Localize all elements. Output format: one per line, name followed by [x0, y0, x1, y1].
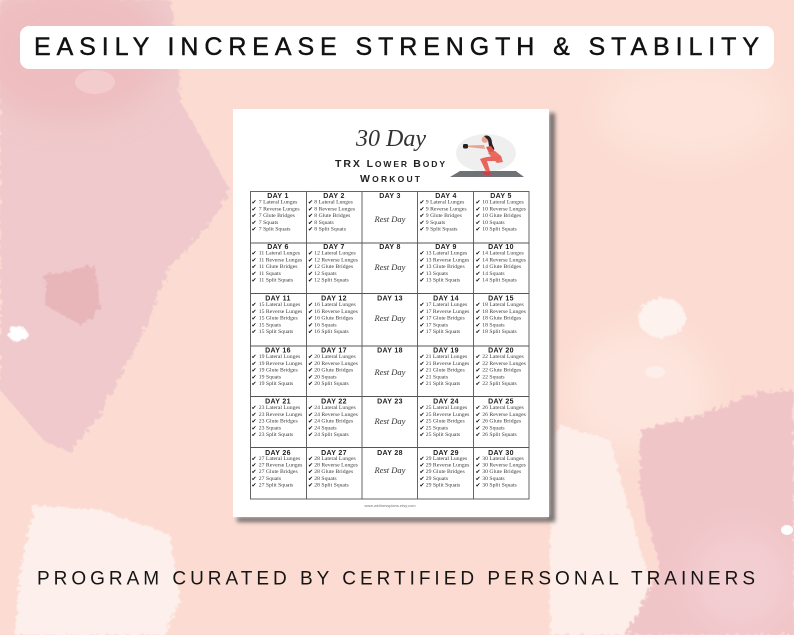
- row 5 cells: [252, 398, 303, 438]
- workout sheet: Rest Day: [374, 465, 406, 475]
- workout sheet: ✔: [420, 468, 425, 476]
- row 2 cells: 11 Split Squats: [259, 278, 294, 284]
- workout sheet: ✔: [476, 250, 481, 257]
- row 6 cells: ✔: [252, 482, 257, 489]
- workout sheet: 24 Squats: [314, 425, 337, 431]
- row 3 cells: [252, 296, 303, 336]
- workout sheet: 30 Glute Bridges: [482, 469, 522, 475]
- workout sheet: 10 Reverse Lunges: [482, 206, 527, 212]
- workout sheet: ✔: [476, 199, 481, 206]
- workout sheet: ✔: [308, 468, 313, 476]
- workout sheet: DAY 18: [377, 348, 403, 354]
- workout sheet: 16 Glute Bridges: [314, 316, 354, 322]
- row 1 cells: 7 Split Squats: [259, 226, 291, 232]
- row 4 cells: ✔: [252, 374, 257, 381]
- row 1 cells: 7 Squats: [259, 220, 279, 226]
- workout sheet: ✔: [308, 482, 313, 489]
- workout sheet: ✔: [308, 380, 313, 388]
- workout sheet: ✔: [420, 456, 425, 462]
- workout sheet: 14 Glute Bridges: [482, 264, 522, 270]
- workout sheet: 21 Lateral Lunges: [426, 354, 468, 360]
- workout sheet: ✔: [420, 432, 425, 438]
- workout sheet: 22 Split Squats: [482, 381, 518, 387]
- workout sheet: Rest Day: [374, 262, 406, 272]
- workout sheet: 16 Lateral Lunges: [314, 302, 356, 308]
- workout sheet: 20 Squats: [314, 374, 337, 380]
- row 4 cells: 19 Reverse Lunges: [259, 361, 303, 367]
- workout sheet: 16 Squats: [314, 322, 337, 328]
- heading: EASILY INCREASE STRENGTH & STABILITY: [34, 33, 759, 61]
- workout sheet: 17 Reverse Lunges: [426, 309, 470, 315]
- workout sheet: 17 Squats: [426, 322, 449, 328]
- workout sheet: 9 Squats: [426, 220, 446, 226]
- workout sheet: 12 Split Squats: [314, 278, 350, 284]
- row 1 cells: DAY 1: [267, 193, 289, 200]
- workout sheet: ✔: [420, 354, 425, 360]
- workout sheet: 18 Lateral Lunges: [482, 302, 524, 308]
- workout sheet: DAY 2: [323, 193, 345, 200]
- workout sheet: ✔: [420, 380, 425, 388]
- workout sheet: 20 Reverse Lunges: [314, 361, 359, 367]
- workout sheet: ✔: [308, 374, 313, 381]
- workout sheet: [233, 109, 549, 517]
- workout calendar grid: [250, 192, 529, 499]
- workout sheet: 13 Split Squats: [426, 278, 461, 284]
- workout sheet: 21 Split Squats: [426, 381, 461, 387]
- workout sheet: Rest Day: [374, 214, 406, 224]
- row 3 cells: 15 Reverse Lunges: [259, 309, 303, 315]
- workout sheet: ✔: [308, 270, 313, 277]
- workout sheet: 10 Glute Bridges: [482, 213, 522, 219]
- workout sheet: ✔: [476, 380, 481, 388]
- workout sheet: DAY 5: [490, 193, 512, 200]
- workout sheet: DAY 29: [433, 450, 459, 457]
- row 6 cells: 27 Lateral Lunges: [259, 456, 301, 462]
- workout sheet: 12 Lateral Lunges: [314, 250, 356, 256]
- workout sheet: 13 Reverse Lunges: [426, 257, 470, 263]
- workout sheet: ✔: [308, 302, 313, 308]
- workout sheet: DAY 25: [488, 398, 514, 406]
- row 4 cells: ✔: [252, 360, 257, 367]
- row 6 cells: 27 Squats: [259, 476, 282, 482]
- workout sheet: ✔: [476, 404, 481, 412]
- row 2 cells: ✔: [252, 250, 257, 257]
- workout sheet: DAY 19: [433, 348, 459, 354]
- workout sheet: DAY 15: [488, 296, 514, 302]
- row 6 cells: 27 Glute Bridges: [259, 469, 298, 475]
- workout sheet: 12 Glute Bridges: [314, 264, 354, 270]
- workout sheet: ✔: [420, 462, 425, 469]
- workout sheet: 21 Reverse Lunges: [426, 361, 470, 367]
- workout sheet: ✔: [476, 212, 481, 220]
- workout sheet: DAY 20: [488, 348, 514, 354]
- row 2 cells: ✔: [252, 277, 257, 284]
- row 1 cells: ✔: [252, 206, 257, 213]
- workout sheet: ✔: [308, 219, 313, 226]
- workout sheet: ✔: [476, 475, 481, 482]
- workout sheet: 16 Reverse Lunges: [314, 309, 359, 315]
- workout sheet: 29 Split Squats: [426, 482, 461, 488]
- workout sheet: 24 Lateral Lunges: [314, 405, 356, 411]
- workout sheet: ✔: [308, 315, 313, 322]
- row 5 cells: 23 Lateral Lunges: [259, 405, 301, 411]
- row 3 cells: 15 Glute Bridges: [259, 316, 298, 322]
- workout sheet: ✔: [308, 462, 313, 469]
- row 3 cells: ✔: [252, 322, 257, 329]
- workout sheet: ✔: [476, 468, 481, 476]
- row 1 cells: ✔: [252, 226, 257, 233]
- footer caption: PROGRAM CURATED BY CERTIFIED PERSONAL TRAINERS: [37, 568, 755, 590]
- workout sheet: ✔: [476, 308, 481, 315]
- workout sheet: ✔: [308, 411, 313, 418]
- workout sheet: ✔: [420, 277, 425, 284]
- row 5 cells: ✔: [252, 404, 257, 412]
- row 5 cells: 23 Reverse Lunges: [259, 412, 303, 418]
- row 6 cells: 27 Reverse Lunges: [259, 462, 303, 468]
- row 3 cells: DAY 11: [265, 296, 291, 302]
- workout sheet: 8 Split Squats: [314, 226, 347, 232]
- workout sheet: Rest Day: [374, 416, 406, 426]
- workout sheet: Rest Day: [374, 313, 406, 323]
- row 4 cells: ✔: [252, 380, 257, 388]
- workout sheet: ✔: [476, 374, 481, 381]
- workout sheet: ✔: [420, 367, 425, 374]
- row 6 cells: [252, 450, 303, 489]
- row 4 cells: [252, 348, 303, 388]
- row 2 cells: 11 Glute Bridges: [259, 264, 298, 270]
- workout sheet: 30 Squats: [482, 476, 505, 482]
- workout sheet: ✔: [476, 432, 481, 438]
- row 6 cells: ✔: [252, 456, 257, 462]
- row 5 cells: DAY 21: [265, 398, 291, 406]
- workout sheet: ✔: [420, 322, 425, 329]
- workout sheet: 13 Lateral Lunges: [426, 250, 468, 256]
- workout sheet: DAY 13: [377, 296, 403, 302]
- row 5 cells: ✔: [252, 418, 257, 425]
- workout sheet: ✔: [476, 270, 481, 277]
- workout sheet: 25 Glute Bridges: [426, 418, 465, 424]
- workout sheet: ✔: [420, 315, 425, 322]
- workout sheet: 30 Split Squats: [482, 482, 518, 488]
- workout sheet: 25 Split Squats: [426, 432, 461, 438]
- workout sheet: 18 Reverse Lunges: [482, 309, 527, 315]
- row 2 cells: ✔: [252, 264, 257, 270]
- workout sheet: 8 Reverse Lunges: [314, 206, 356, 212]
- row 4 cells: DAY 16: [265, 348, 291, 354]
- workout sheet: ✔: [308, 418, 313, 425]
- workout sheet: ✔: [308, 456, 313, 462]
- workout sheet: DAY 9: [435, 244, 457, 251]
- workout sheet: DAY 28: [377, 450, 403, 457]
- workout sheet: ✔: [476, 328, 481, 336]
- workout sheet: ✔: [308, 367, 313, 374]
- row 3 cells: 15 Lateral Lunges: [259, 302, 301, 308]
- workout sheet: ✔: [476, 264, 481, 270]
- row 3 cells: 15 Squats: [259, 322, 282, 328]
- workout sheet: 22 Glute Bridges: [482, 368, 522, 374]
- workout sheet: ✔: [308, 264, 313, 270]
- workout sheet: ✔: [420, 264, 425, 270]
- workout sheet: 25 Squats: [426, 425, 449, 431]
- workout sheet: 28 Reverse Lunges: [314, 462, 359, 468]
- row 5 cells: ✔: [252, 425, 257, 432]
- workout sheet: 18 Squats: [482, 322, 505, 328]
- workout sheet: DAY 17: [321, 348, 347, 354]
- row 1 cells: [252, 193, 300, 233]
- workout sheet: ✔: [476, 418, 481, 425]
- sheet title: 30 Day: 30 Day: [355, 126, 426, 152]
- workout sheet: ✔: [476, 206, 481, 213]
- workout sheet: DAY 24: [433, 398, 459, 406]
- workout sheet: ✔: [308, 425, 313, 432]
- workout sheet: ✔: [420, 226, 425, 233]
- workout sheet: ✔: [308, 360, 313, 367]
- workout sheet: ✔: [308, 328, 313, 336]
- workout sheet: 14 Split Squats: [482, 278, 518, 284]
- row 4 cells: 19 Split Squats: [259, 381, 294, 387]
- workout sheet: 26 Reverse Lunges: [482, 412, 527, 418]
- workout sheet: ✔: [308, 199, 313, 206]
- row 4 cells: ✔: [252, 367, 257, 374]
- icon: woman squatting on mat: [450, 134, 524, 177]
- workout sheet: 16 Split Squats: [314, 329, 350, 335]
- workout sheet: 29 Lateral Lunges: [426, 456, 468, 462]
- workout sheet: 25 Reverse Lunges: [426, 412, 470, 418]
- workout sheet: 21 Squats: [426, 374, 449, 380]
- page shadow: [237, 113, 555, 522]
- workout sheet: ✔: [476, 257, 481, 264]
- workout sheet: 9 Glute Bridges: [426, 213, 463, 219]
- workout sheet: ✔: [476, 462, 481, 469]
- row 1 cells: 7 Lateral Lunges: [259, 200, 298, 206]
- workout sheet: ✔: [476, 456, 481, 462]
- workout sheet: DAY 27: [321, 450, 347, 457]
- workout sheet: 9 Lateral Lunges: [426, 200, 465, 206]
- workout sheet: ✔: [420, 374, 425, 381]
- row 2 cells: ✔: [252, 257, 257, 264]
- workout sheet: 22 Reverse Lunges: [482, 361, 527, 367]
- workout sheet: ✔: [476, 367, 481, 374]
- workout sheet: ✔: [420, 411, 425, 418]
- workout sheet: 14 Reverse Lunges: [482, 257, 527, 263]
- row 4 cells: ✔: [252, 354, 257, 360]
- workout sheet: 14 Lateral Lunges: [482, 250, 524, 256]
- workout sheet: 13 Squats: [426, 271, 449, 277]
- row 2 cells: DAY 6: [267, 244, 289, 251]
- header pill: [20, 26, 774, 69]
- workout sheet: ✔: [420, 360, 425, 367]
- workout sheet: ✔: [308, 432, 313, 438]
- row 3 cells: ✔: [252, 308, 257, 315]
- workout sheet: 8 Glute Bridges: [314, 213, 351, 219]
- row 6 cells: ✔: [252, 462, 257, 469]
- workout sheet: 13 Glute Bridges: [426, 264, 465, 270]
- workout sheet: ✔: [308, 404, 313, 412]
- row 1 cells: 7 Glute Bridges: [259, 213, 296, 219]
- workout sheet: DAY 14: [433, 296, 459, 302]
- row 5 cells: ✔: [252, 411, 257, 418]
- workout sheet: 30 Lateral Lunges: [482, 456, 524, 462]
- workout sheet: DAY 8: [379, 244, 401, 251]
- workout sheet: 9 Split Squats: [426, 226, 458, 232]
- workout sheet: ✔: [308, 354, 313, 360]
- workout sheet: ✔: [420, 302, 425, 308]
- workout sheet: ✔: [420, 418, 425, 425]
- workout sheet: 30 Reverse Lunges: [482, 462, 527, 468]
- workout sheet: DAY 7: [323, 244, 345, 251]
- workout sheet: 10 Lateral Lunges: [482, 200, 524, 206]
- workout sheet: 29 Reverse Lunges: [426, 462, 470, 468]
- workout sheet: 26 Squats: [482, 425, 505, 431]
- row 6 cells: DAY 26: [265, 450, 291, 457]
- workout sheet: 25 Lateral Lunges: [426, 405, 468, 411]
- workout sheet: 26 Split Squats: [482, 432, 518, 438]
- workout sheet: DAY 22: [321, 398, 347, 406]
- row 5 cells: 23 Squats: [259, 425, 282, 431]
- workout sheet: 8 Squats: [314, 220, 335, 226]
- row 3 cells: ✔: [252, 315, 257, 322]
- workout sheet: ✔: [476, 360, 481, 367]
- workout sheet: ✔: [308, 475, 313, 482]
- workout sheet: ✔: [420, 199, 425, 206]
- workout sheet: 10 Squats: [482, 220, 505, 226]
- workout sheet: 22 Squats: [482, 374, 505, 380]
- workout sheet: ✔: [308, 226, 313, 233]
- workout sheet: ✔: [420, 270, 425, 277]
- workout sheet: ✔: [420, 206, 425, 213]
- row 4 cells: 19 Squats: [259, 374, 282, 380]
- workout sheet: 20 Split Squats: [314, 381, 350, 387]
- row 2 cells: 11 Lateral Lunges: [259, 250, 301, 256]
- row 3 cells: ✔: [252, 302, 257, 308]
- workout sheet: 22 Lateral Lunges: [482, 354, 524, 360]
- workout sheet: 17 Glute Bridges: [426, 316, 465, 322]
- workout sheet: ✔: [308, 277, 313, 284]
- row 1 cells: ✔: [252, 212, 257, 220]
- workout sheet: ✔: [476, 482, 481, 489]
- workout sheet: ✔: [476, 411, 481, 418]
- workout sheet: 14 Squats: [482, 271, 505, 277]
- row 2 cells: ✔: [252, 270, 257, 277]
- workout sheet: 10 Split Squats: [482, 226, 518, 232]
- workout sheet: ✔: [420, 482, 425, 489]
- workout sheet: ✔: [476, 354, 481, 360]
- workout sheet: ✔: [308, 212, 313, 220]
- workout sheet: 29 Squats: [426, 476, 449, 482]
- workout sheet: ✔: [420, 257, 425, 264]
- workout sheet: 28 Lateral Lunges: [314, 456, 356, 462]
- row 6 cells: ✔: [252, 468, 257, 476]
- workout sheet: ✔: [420, 404, 425, 412]
- workout sheet: ✔: [420, 308, 425, 315]
- sheet title: TRX Lower Body: TRX LOWER BODY: [335, 158, 445, 170]
- workout sheet: DAY 3: [379, 193, 401, 200]
- workout sheet: 24 Glute Bridges: [314, 418, 354, 424]
- workout sheet: 28 Squats: [314, 476, 337, 482]
- row 3 cells: 15 Split Squats: [259, 329, 294, 335]
- workout sheet: 24 Reverse Lunges: [314, 412, 359, 418]
- workout sheet: ✔: [420, 475, 425, 482]
- workout sheet: DAY 4: [435, 193, 457, 200]
- workout sheet: 28 Glute Bridges: [314, 469, 354, 475]
- row 4 cells: 19 Lateral Lunges: [259, 354, 301, 360]
- workout sheet: ✔: [420, 219, 425, 226]
- row 2 cells: [252, 244, 303, 284]
- workout sheet: 18 Split Squats: [482, 329, 518, 335]
- workout sheet: 12 Reverse Lunges: [314, 257, 359, 263]
- workout sheet: 26 Lateral Lunges: [482, 405, 524, 411]
- sheet title: Workout: W ORKOUT: [360, 173, 421, 185]
- workout sheet: 24 Split Squats: [314, 432, 350, 438]
- row 4 cells: 19 Glute Bridges: [259, 368, 298, 374]
- workout sheet: ✔: [420, 425, 425, 432]
- workout sheet: ✔: [476, 219, 481, 226]
- workout sheet: ✔: [308, 322, 313, 329]
- row 5 cells: ✔: [252, 432, 257, 438]
- workout sheet: ✔: [476, 425, 481, 432]
- workout sheet: DAY 23: [377, 398, 403, 406]
- workout sheet: ✔: [420, 212, 425, 220]
- workout sheet: 9 Reverse Lunges: [426, 206, 467, 212]
- row 1 cells: ✔: [252, 219, 257, 226]
- row 1 cells: 7 Reverse Lunges: [259, 206, 300, 212]
- row 6 cells: 27 Split Squats: [259, 482, 294, 488]
- row 1 cells: ✔: [252, 199, 257, 206]
- workout sheet: ✔: [308, 206, 313, 213]
- workout sheet: DAY 12: [321, 296, 347, 302]
- workout sheet: ✔: [308, 257, 313, 264]
- row 5 cells: 23 Glute Bridges: [259, 418, 298, 424]
- workout sheet: 8 Lateral Lunges: [314, 200, 354, 206]
- workout sheet: ✔: [308, 308, 313, 315]
- workout sheet: ✔: [308, 250, 313, 257]
- workout sheet: 12 Squats: [314, 271, 337, 277]
- workout sheet: 20 Glute Bridges: [314, 368, 354, 374]
- workout sheet: ✔: [476, 302, 481, 308]
- workout sheet: ✔: [476, 226, 481, 233]
- workout sheet: ✔: [420, 328, 425, 336]
- workout sheet: 21 Glute Bridges: [426, 368, 465, 374]
- workout sheet: DAY 10: [488, 244, 514, 251]
- row 6 cells: ✔: [252, 475, 257, 482]
- workout sheet: 17 Lateral Lunges: [426, 302, 468, 308]
- workout sheet: 18 Glute Bridges: [482, 316, 522, 322]
- workout sheet: ✔: [476, 315, 481, 322]
- workout sheet: 26 Glute Bridges: [482, 418, 522, 424]
- workout sheet: 17 Split Squats: [426, 329, 461, 335]
- row 3 cells: ✔: [252, 328, 257, 336]
- sheet footer url: www.wellnessplans.etsy.com: [364, 503, 416, 508]
- workout sheet: 20 Lateral Lunges: [314, 354, 356, 360]
- workout sheet: DAY 30: [488, 450, 514, 457]
- workout sheet: 29 Glute Bridges: [426, 469, 465, 475]
- workout sheet: ✔: [420, 250, 425, 257]
- row 2 cells: 11 Squats: [259, 271, 282, 277]
- workout sheet: Rest Day: [374, 367, 406, 377]
- row 5 cells: 23 Split Squats: [259, 432, 294, 438]
- workout sheet: ✔: [476, 277, 481, 284]
- workout sheet: ✔: [476, 322, 481, 329]
- workout sheet: 28 Split Squats: [314, 482, 350, 488]
- row 2 cells: 11 Reverse Lunges: [259, 257, 303, 263]
